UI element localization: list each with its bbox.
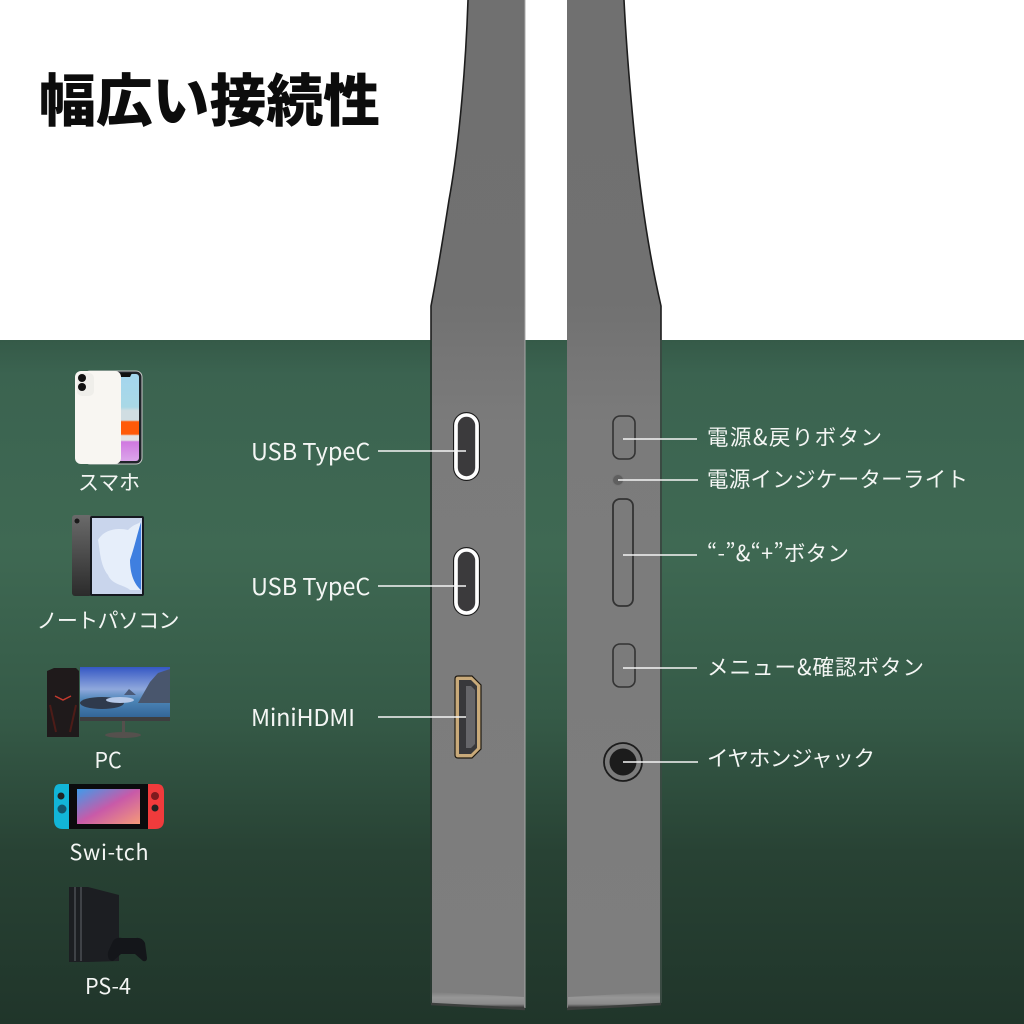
indicator light bbox=[612, 474, 624, 486]
label: PS-4: PS-4 bbox=[85, 970, 131, 1001]
control label: earphone jack: イヤホンジャック bbox=[707, 742, 875, 773]
port label: USB TypeC: USB TypeC bbox=[251, 433, 370, 467]
label: tablet: ノートパソコン bbox=[36, 605, 180, 635]
port: USB TypeC 2 bbox=[454, 548, 480, 616]
button: menu and confirm bbox=[613, 644, 635, 687]
control label: power indicator light: 電源インジケーターライト bbox=[707, 463, 968, 494]
port: USB TypeC 1 bbox=[454, 412, 480, 480]
icon: desktop PC bbox=[47, 667, 170, 738]
control label: minus plus button: “-”&“+”ボタン bbox=[707, 537, 849, 568]
label: PC: PC bbox=[94, 744, 122, 775]
title: 幅広い接続性 bbox=[39, 56, 380, 138]
button: minus plus bbox=[613, 499, 633, 606]
green background panel bbox=[0, 340, 1024, 1024]
icon: tablet bbox=[72, 515, 144, 596]
port label: USB TypeC: USB TypeC bbox=[251, 568, 370, 602]
icon: PlayStation 4 bbox=[69, 887, 147, 962]
port: Mini HDMI bbox=[455, 676, 481, 758]
icon: smartphone bbox=[75, 371, 142, 464]
control label: menu and confirm button: メニュー&確認ボタン bbox=[707, 651, 924, 682]
label: Switch: Swi-tch bbox=[70, 836, 148, 867]
control label: power and back button: 電源&戻りボタン bbox=[707, 421, 882, 452]
button: power and back bbox=[613, 416, 635, 459]
leader lines bbox=[378, 439, 698, 762]
monitor right side edge bbox=[567, 0, 661, 1009]
earphone jack bbox=[604, 743, 642, 781]
port label: MiniHDMI: MiniHDMI bbox=[251, 699, 355, 733]
monitor left side edge bbox=[431, 0, 525, 1009]
icon: Nintendo Switch bbox=[54, 784, 164, 829]
label: smartphone: スマホ bbox=[78, 467, 140, 497]
